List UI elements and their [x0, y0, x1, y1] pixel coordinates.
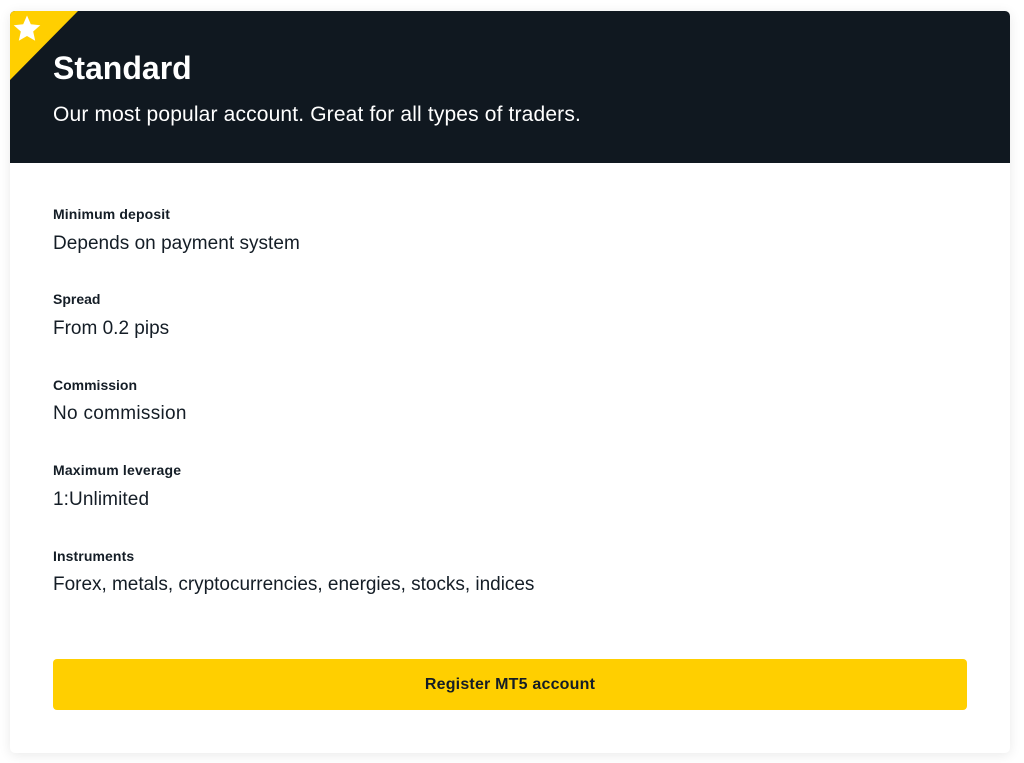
button: register MT5 account: Register MT5 account — [425, 676, 595, 693]
value: maximum leverage: 1:Unlimited — [53, 489, 149, 510]
value: minimum deposit: Depends on payment system — [53, 233, 300, 254]
label: commission: Commission — [53, 377, 137, 393]
icon: yellow corner ribbon with star — [10, 11, 78, 80]
label: spread: Spread — [53, 291, 100, 307]
panel: card header — [10, 11, 1010, 163]
value: instruments: Forex, metals, cryptocurrencies, energies, stocks, indices — [53, 574, 534, 595]
label: maximum leverage: Maximum leverage — [53, 462, 181, 478]
button: register MT5 account — [53, 659, 967, 710]
label: instruments: Instruments — [53, 548, 134, 564]
value: spread: From 0.2 pips — [53, 318, 169, 339]
value: commission: No commission — [53, 403, 187, 424]
subtitle: Our most popular account. Great for all types of traders. — [53, 103, 581, 126]
label: minimum deposit: Minimum deposit — [53, 206, 170, 222]
title: Standard — [53, 50, 192, 86]
